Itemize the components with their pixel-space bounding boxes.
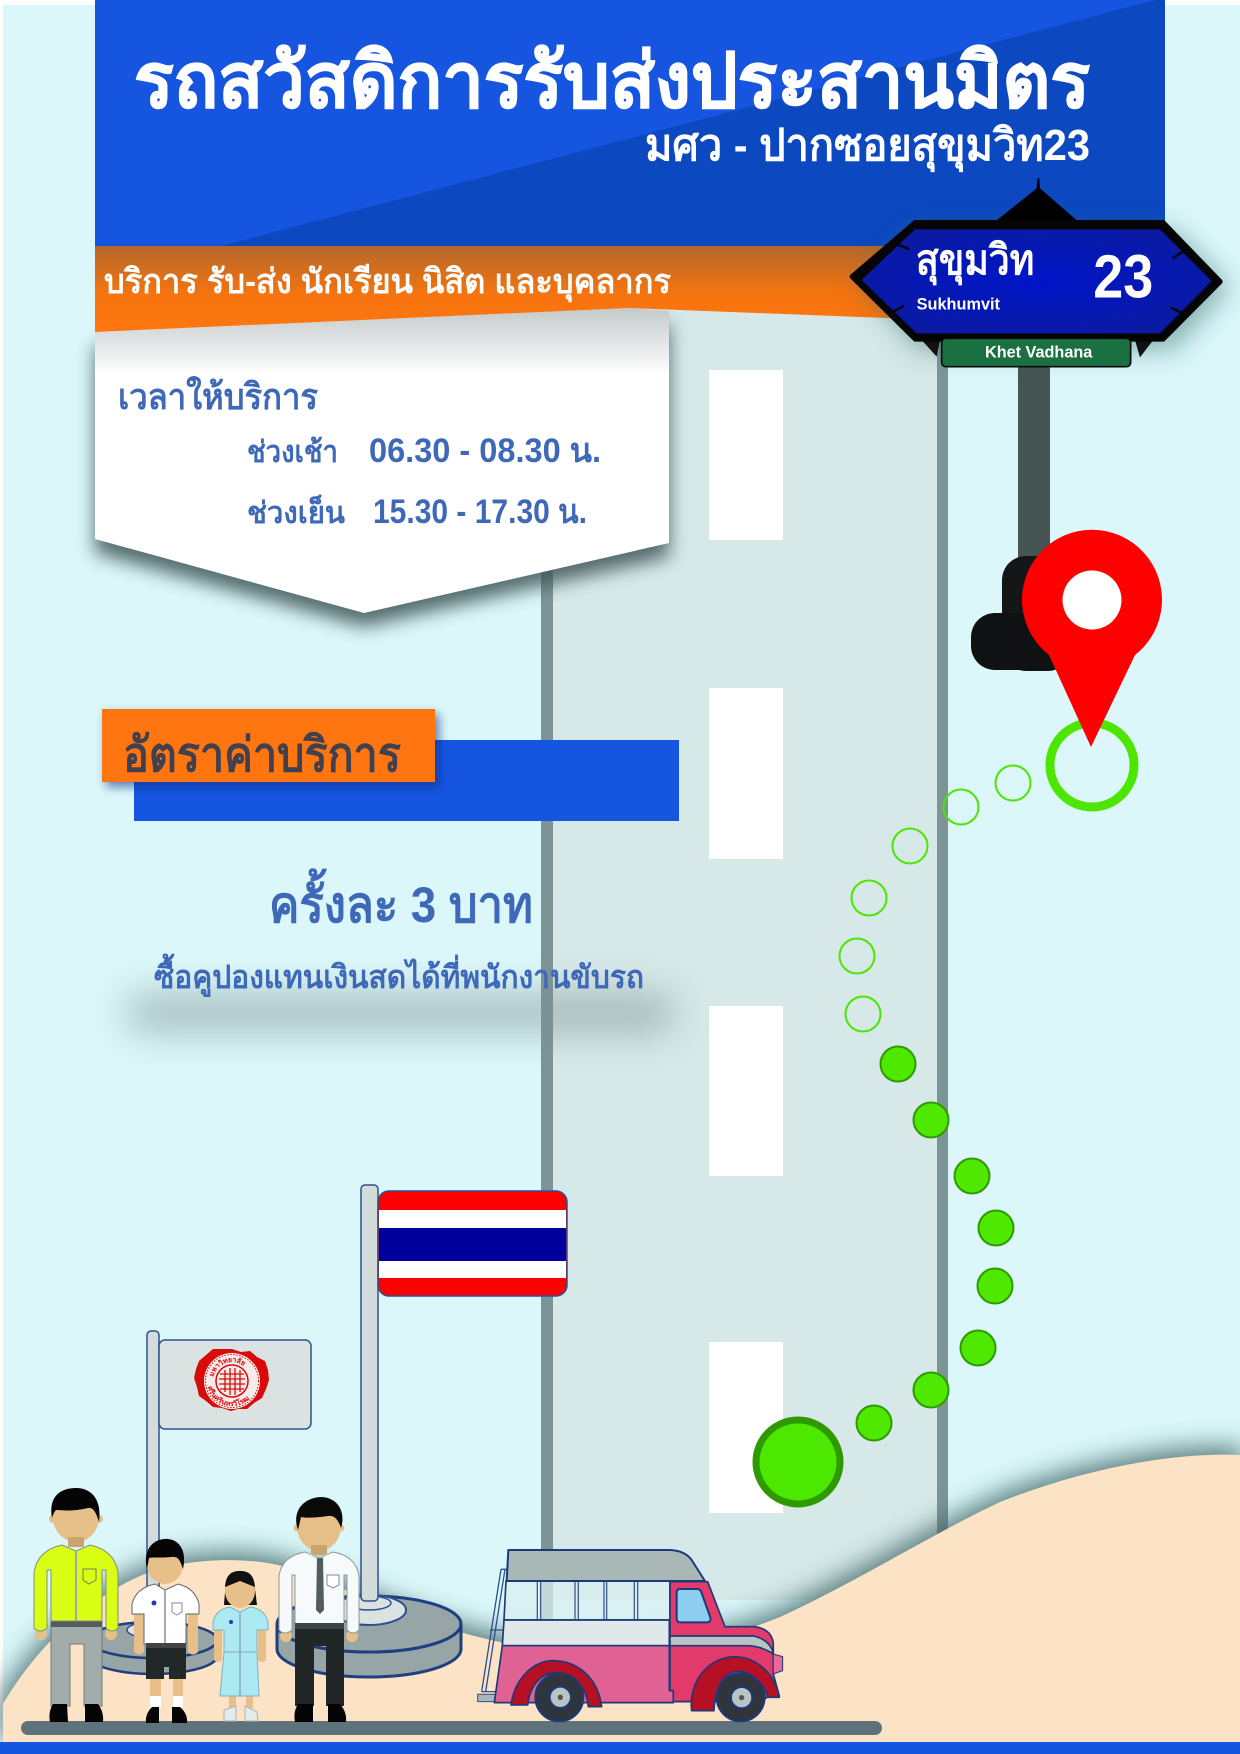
person: female student xyxy=(213,1571,268,1721)
route start dot xyxy=(756,1420,840,1504)
university seal: มหาวิทยาลัย xyxy=(210,1358,246,1376)
thai flag xyxy=(277,1185,567,1677)
sign number: 23 xyxy=(1093,243,1153,312)
truck windows xyxy=(504,1581,670,1620)
bottom blue strip xyxy=(0,1742,1240,1754)
district plate: Khet Vadhana xyxy=(985,343,1093,362)
sign face xyxy=(862,229,1212,333)
truck front arch xyxy=(691,1657,779,1711)
sign feet xyxy=(922,340,1153,357)
sign finial xyxy=(995,178,1078,222)
fee heading xyxy=(102,709,679,821)
person: staff in white shirt xyxy=(279,1497,359,1722)
ground bar xyxy=(21,1721,882,1735)
truck side panel xyxy=(502,1620,669,1646)
truck roof xyxy=(507,1550,705,1581)
route dots: hollow xyxy=(840,766,1030,1032)
fee text: ครั้งละ 3 บาท xyxy=(269,868,533,933)
person: male student xyxy=(132,1539,199,1723)
service hours heading: เวลาให้บริการ xyxy=(118,375,319,417)
evening time: 15.30 - 17.30 น. xyxy=(373,493,587,531)
person: staff in yellow shirt xyxy=(34,1488,118,1722)
truck cab window xyxy=(677,1589,711,1622)
sign frame xyxy=(852,223,1220,339)
service band text: บริการ รับ-ส่ง นักเรียน นิสิต และบุคลากร xyxy=(104,263,672,303)
truck front wheel xyxy=(717,1673,765,1721)
title: รถสวัสดิการรับส่งประสานมิตร xyxy=(134,39,1090,124)
street sign xyxy=(852,178,1230,367)
route dots: filled xyxy=(856,1046,1014,1440)
truck stripe xyxy=(670,1636,773,1653)
truck rear arch xyxy=(511,1661,602,1707)
panel: service hours xyxy=(95,305,669,627)
sign thai name: สุขุมวิท xyxy=(916,236,1034,286)
coupon note xyxy=(125,953,675,1034)
morning label: ช่วงเช้า xyxy=(247,436,338,469)
sign post and black base xyxy=(971,360,1072,671)
truck rear wheel xyxy=(535,1673,583,1721)
evening label: ช่วงเย็น xyxy=(247,494,345,530)
district plate xyxy=(942,338,1131,367)
icon: map pin xyxy=(1022,530,1162,747)
orange service band xyxy=(95,246,1165,332)
truck ladder xyxy=(482,1569,508,1692)
fee heading: อัตราค่าบริการ xyxy=(123,729,401,782)
university seal xyxy=(194,1349,269,1411)
route destination ring xyxy=(1050,723,1134,807)
university flag xyxy=(102,1330,312,1676)
sign latin name: Sukhumvit xyxy=(917,294,1000,313)
truck cab xyxy=(670,1582,779,1702)
header banner xyxy=(95,0,1165,246)
truck body xyxy=(494,1646,673,1703)
hills xyxy=(3,1451,1240,1742)
road xyxy=(541,300,948,1660)
coupon note: ซื้อคูปองแทนเงินสดได้ที่พนักงานขับรถ xyxy=(154,953,644,998)
morning time: 06.30 - 08.30 น. xyxy=(369,432,601,470)
subtitle: มศว - ปากซอยสุขุมวิท23 xyxy=(645,121,1090,173)
songthaew truck xyxy=(478,1550,783,1721)
university seal: ศรีนครินทรวิโรฒ xyxy=(208,1386,250,1406)
